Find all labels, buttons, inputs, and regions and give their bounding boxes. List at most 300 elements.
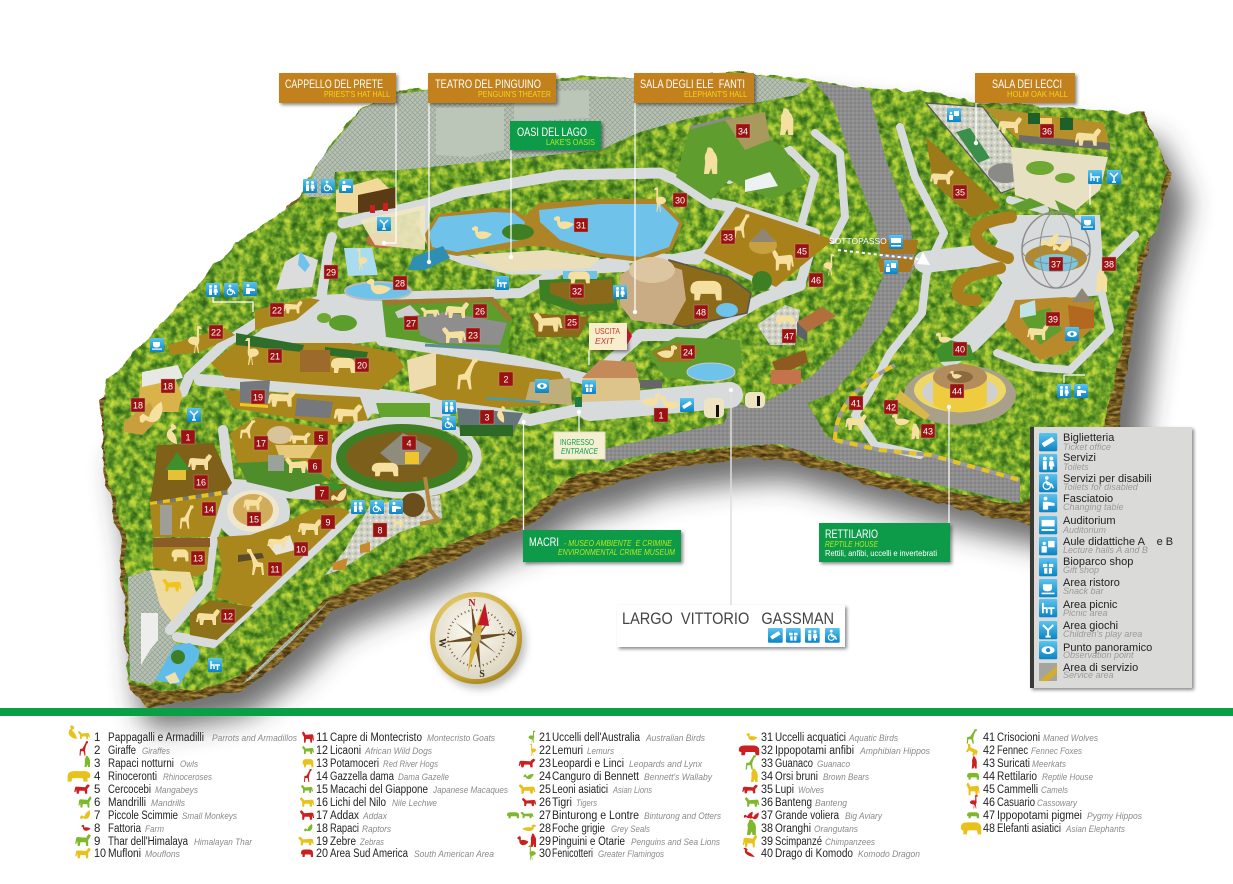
enclosure 15 <box>227 490 279 532</box>
row 34: Orsi bruni <box>775 771 818 783</box>
label: entrance <box>554 432 605 459</box>
row 35: Lupi <box>775 784 794 796</box>
marker 1: 1 <box>658 410 664 420</box>
row 33: 33 <box>761 758 773 770</box>
row 3: 3 <box>94 758 100 770</box>
marker 23: 23 <box>468 330 478 340</box>
marker 4: 4 <box>406 438 412 448</box>
row 23 <box>519 758 703 770</box>
enclosure 36 <box>983 107 1110 150</box>
row 48: Elefanti asiatici <box>997 823 1061 835</box>
green lawn near 2 <box>376 403 430 417</box>
marker 8 <box>373 523 387 537</box>
row 36: Banteng <box>775 797 812 809</box>
row 20 <box>301 848 494 860</box>
marker 30: 30 <box>675 196 685 206</box>
legend item shop: Bioparco shop <box>1063 556 1133 568</box>
marker 47: 47 <box>784 332 794 342</box>
marker 32 <box>570 284 584 298</box>
row 14: Gazzella dama <box>330 771 394 783</box>
marker 35: 35 <box>955 188 965 198</box>
hill enclosure 34 <box>676 112 808 200</box>
row 10 <box>75 848 180 860</box>
lake bank <box>425 199 683 262</box>
marker 3: 3 <box>484 412 490 422</box>
row 27: Binturong and Otters <box>644 811 721 822</box>
row 15: Japanese Macaques <box>432 785 508 796</box>
icon: observation 2 <box>535 379 549 393</box>
row 4: 4 <box>94 771 101 783</box>
marker 25 <box>565 315 579 329</box>
marker 44 <box>950 384 964 398</box>
legend item toilets <box>1039 452 1096 472</box>
legend item play <box>1039 620 1142 639</box>
enclosure 7 <box>317 482 347 507</box>
legend item ticket: Biglietteria <box>1063 432 1115 444</box>
row 13: Potamoceri <box>330 758 379 770</box>
row 14: Dama Gazelle <box>398 772 449 783</box>
row 1: 1 <box>94 732 100 744</box>
icon: picnic centre <box>495 276 509 290</box>
icons: lemur area services <box>206 282 257 297</box>
marker 4 <box>402 436 416 450</box>
row 26: Tigers <box>576 798 597 809</box>
row 38: 38 <box>761 823 773 835</box>
label: Oasi del Lago: OASI DEL LAGO <box>517 125 587 139</box>
marker 36: 36 <box>1042 126 1052 136</box>
row 16 <box>300 797 437 809</box>
legend item changing <box>1039 493 1124 512</box>
label: Largo Vittorio Gassman: LARGO VITTORIO GASSMAN <box>622 609 834 628</box>
marker 11 <box>268 562 282 576</box>
row 4 <box>68 771 212 783</box>
marker 5 <box>314 431 328 445</box>
icon: gift shop <box>582 380 596 394</box>
row 8 <box>82 823 164 835</box>
row 45: 45 <box>983 784 995 796</box>
row 16: Nile Lechwe <box>392 798 437 809</box>
marker 22 left <box>209 325 223 339</box>
row 33: Guanaco <box>817 759 850 770</box>
label: Teatro del Pinguino: TEATRO DEL PINGUINO <box>435 77 541 91</box>
marker 10 <box>294 542 308 556</box>
row 34 <box>751 769 869 783</box>
marker 44: 44 <box>952 386 962 396</box>
marker 28 <box>393 276 407 290</box>
row 25: Asian Lions <box>612 785 652 796</box>
row 23: Leopards and Lynx <box>629 759 703 770</box>
enclosure area 26, 27 and 23 <box>382 297 512 353</box>
row 2 <box>80 741 170 757</box>
marker 27 <box>404 316 418 330</box>
row 8: 8 <box>94 823 100 835</box>
label: Largo Vittorio Gassman <box>617 605 845 647</box>
row 10: 10 <box>94 848 106 860</box>
legend item picnic <box>1039 599 1118 618</box>
marker 24 <box>681 345 695 359</box>
marker 35 <box>953 185 967 199</box>
row 44: Reptile House <box>1042 772 1093 783</box>
legend item play: Area giochi <box>1063 620 1118 632</box>
row 12: Licaoni <box>330 745 361 757</box>
row 46 <box>970 795 1078 809</box>
row 25: Leoni asiatici <box>552 784 608 796</box>
row 43: Suricati <box>997 758 1030 770</box>
legend item disabled: Toilets for disabled <box>1063 482 1139 492</box>
farm hut and snake path <box>332 477 438 570</box>
cappello building <box>336 178 425 250</box>
row 38: Orangutans <box>814 824 858 835</box>
marker 25: 25 <box>567 318 577 328</box>
marker 9 <box>321 515 335 529</box>
row 47 <box>967 810 1142 822</box>
marker 12: 12 <box>223 612 233 622</box>
marker 32: 32 <box>572 286 582 296</box>
marker 11: 11 <box>270 564 280 574</box>
marker 17 <box>254 436 268 450</box>
enclosure 24 <box>647 337 742 383</box>
island foliage surface <box>103 73 1165 690</box>
row 22 <box>530 744 614 757</box>
enclosure 3 <box>457 408 523 436</box>
compass letters: W <box>436 638 447 648</box>
legend item observation: Observation point <box>1063 650 1134 660</box>
row 36: 36 <box>761 797 773 809</box>
label: Sala degli Elefanti: ELEPHANT'S HALL <box>684 89 747 99</box>
row 34: 34 <box>761 771 774 783</box>
row 15 <box>301 784 508 796</box>
label: Teatro del Pinguino: PENGUIN'S THEATER <box>478 89 551 99</box>
building at entrance <box>582 360 662 402</box>
hut 16 <box>165 452 190 480</box>
row 2: Giraffe <box>108 745 136 757</box>
row 26 <box>522 797 597 809</box>
row 9: Thar dell'Himalaya <box>108 836 189 848</box>
footpath network <box>170 127 1135 643</box>
marker 42: 42 <box>886 402 896 412</box>
row 1 <box>65 724 297 744</box>
row 19: 19 <box>316 836 328 848</box>
icon: lecture hall top <box>947 108 961 122</box>
enclosure 4 <box>336 424 468 492</box>
row 46: Casuario <box>997 797 1035 809</box>
row 23: Leopardi e Linci <box>552 758 624 770</box>
row 43: Meerkats <box>1032 759 1066 770</box>
marker 6 <box>308 459 322 473</box>
yellow dashed service road <box>150 365 1020 503</box>
label: entrance: INGRESSO <box>560 437 594 447</box>
icon: toilets 3 <box>442 400 456 414</box>
marker 39 <box>1046 312 1060 326</box>
row 32 <box>739 745 930 757</box>
label: Sala dei Lecci: SALA DEI LECCI <box>992 77 1062 91</box>
legend item picnic: Area picnic <box>1063 599 1118 611</box>
marker 47 <box>782 329 796 343</box>
marker 46 <box>809 273 823 287</box>
row 6: Mandrilli <box>108 797 146 809</box>
enclosure 25 <box>529 313 589 337</box>
marker 29 <box>324 265 338 279</box>
icon: play right <box>1107 170 1121 184</box>
gates <box>704 392 765 418</box>
compass letters: S <box>479 669 485 680</box>
enclosure 12 <box>190 600 253 640</box>
enclosures 17, 5 and 6 <box>230 417 333 492</box>
row 6: Mandrills <box>151 798 185 809</box>
row 39: Chimpanzees <box>825 837 875 848</box>
row 8: Farm <box>145 824 164 835</box>
row 45 <box>966 783 1068 796</box>
label: Rettilario: REPTILE HOUSE <box>825 539 878 549</box>
icon: changing right <box>1074 384 1088 398</box>
legend item picnic: Picnic area <box>1063 608 1108 618</box>
row 16: 16 <box>316 797 328 809</box>
row 24: Bennett's Wallaby <box>644 772 713 783</box>
row 24: 24 <box>539 771 552 783</box>
row 13: 13 <box>316 758 328 770</box>
row 44: 44 <box>983 771 996 783</box>
row 43 <box>972 756 1066 770</box>
marker 41 <box>849 396 863 410</box>
label: Sala dei Lecci: HOLM OAK HALL <box>1007 89 1068 99</box>
row 20: 20 <box>316 848 328 860</box>
label: Rettilario: RETTILARIO <box>825 527 878 541</box>
row 48: 48 <box>983 823 995 835</box>
label: Oasi del Lago: LAKE'S OASIS <box>546 137 595 147</box>
row 17: 17 <box>316 810 328 822</box>
row 32: Amphibian Hippos <box>859 746 930 757</box>
label: Macri museum: ENVIRONMENTAL CRIME MUSEUM <box>558 547 676 557</box>
marker 30 <box>673 193 687 207</box>
animal key column 4 <box>739 732 930 860</box>
marker 14 <box>202 502 216 516</box>
animal key column 2 <box>298 731 508 860</box>
enclosure 13 <box>153 538 210 577</box>
number markers <box>131 124 1116 623</box>
row 48 <box>961 822 1125 835</box>
label: Rettilario: Rettili, anfibi, uccelli e invertebrati <box>825 549 937 558</box>
row 7: Piccole Scimmie <box>108 810 178 822</box>
row 40 <box>742 847 920 860</box>
row 33: Guanaco <box>775 758 813 770</box>
hatched zone bottom left <box>128 570 333 685</box>
row 17: Addax <box>330 810 359 822</box>
legend item toilets: Toilets <box>1063 462 1089 472</box>
row 10: Mufloni <box>108 848 141 860</box>
row 18: 18 <box>316 823 328 835</box>
enclosure 9, 10, 11 <box>215 507 350 607</box>
marker 6: 6 <box>312 462 318 472</box>
row 5: Cercocebi <box>108 784 151 796</box>
marker 19 <box>251 390 265 404</box>
marker 22 <box>270 303 284 317</box>
row 18 <box>303 822 391 835</box>
legend item ticket: Ticket office <box>1063 442 1111 452</box>
row 41 <box>967 729 1098 744</box>
marker 33 <box>721 230 735 244</box>
animal key column 1 <box>65 724 297 860</box>
row 42: Fennec <box>997 745 1028 757</box>
row 11: Montecristo Goats <box>427 733 495 744</box>
marker 18 left <box>131 398 145 412</box>
row 17 <box>300 810 388 822</box>
legend item ticket <box>1039 432 1115 452</box>
row 35: 35 <box>761 784 773 796</box>
row 27: Binturong e Lontre <box>552 810 639 822</box>
main road <box>600 82 1020 503</box>
row 47: 47 <box>983 810 995 822</box>
icons: farm services <box>351 500 403 514</box>
green divider band <box>0 708 1233 716</box>
label: Oasi del Lago <box>510 121 601 150</box>
yellow monkey in sand area <box>162 579 182 591</box>
row 9: Himalayan Thar <box>194 837 253 848</box>
row 42: 42 <box>983 745 995 757</box>
marker 41: 41 <box>851 398 861 408</box>
marker 37 <box>1049 257 1063 271</box>
row 16: Lichi del Nilo <box>330 797 386 809</box>
row 46: 46 <box>983 797 995 809</box>
row 32: Ippopotami anfibi <box>775 745 854 757</box>
compass <box>430 592 526 689</box>
legend item auditorium: Auditorium <box>1063 515 1116 527</box>
row 2: Giraffes <box>142 746 170 757</box>
row 10: Mouflons <box>145 849 180 860</box>
marker 34: 34 <box>738 126 748 136</box>
label: Sala dei Lecci <box>975 73 1075 103</box>
legend item lecture <box>1039 536 1173 555</box>
row 39: 39 <box>761 836 773 848</box>
marker 33: 33 <box>723 232 733 242</box>
marker 2: 2 <box>503 374 509 384</box>
marker 12 <box>221 609 235 623</box>
lake water <box>429 204 679 257</box>
big aviary <box>1022 212 1090 288</box>
marker 2 <box>499 372 513 386</box>
marker 43 <box>921 424 935 438</box>
marker 7 <box>315 486 329 500</box>
label: Cappello del Prete: PRIEST'S HAT HALL <box>324 89 390 99</box>
marker 42 <box>884 400 898 414</box>
icon: toilets centre <box>613 285 627 299</box>
marker 38: 38 <box>1104 260 1114 270</box>
hatched hill top <box>305 75 812 197</box>
red seats at priest's hat <box>370 203 388 213</box>
row 2: 2 <box>94 745 100 757</box>
row 15: Macachi del Giappone <box>330 784 428 796</box>
row 20: South American Area <box>414 849 494 860</box>
marker 5: 5 <box>318 434 324 444</box>
row 11 <box>302 731 495 744</box>
legend item auditorium: Auditorium <box>1062 525 1107 535</box>
marker 43: 43 <box>923 426 933 436</box>
row 48: Asian Elephants <box>1065 824 1125 835</box>
row 40: Drago di Komodo <box>775 848 853 860</box>
legend item shop <box>1039 556 1133 576</box>
theater rotunda and enclosure 48 <box>620 257 751 327</box>
icon: observation 39 <box>1065 327 1079 341</box>
row 12: African Wild Dogs <box>364 746 432 757</box>
row 17: Addax <box>362 811 388 822</box>
row 19: Zebre <box>330 836 356 848</box>
row 27 <box>507 810 721 822</box>
underpass buildings <box>878 240 918 272</box>
island soil edge <box>100 90 1170 708</box>
enclosure 19 <box>223 380 368 425</box>
marker 31 <box>574 218 588 232</box>
enclosure 20 and 21 <box>211 333 404 390</box>
legend item service: Service area <box>1063 670 1114 680</box>
label: exit flag <box>589 323 632 350</box>
enclosure 33 and 45 <box>704 207 833 291</box>
marker 38 <box>1102 257 1116 271</box>
legend item lecture: Aule didattiche A e B <box>1063 536 1173 548</box>
label: Macri museum <box>523 530 681 562</box>
label: Cappello del Prete <box>279 73 396 103</box>
row 21 <box>528 731 705 744</box>
row 14 <box>304 769 449 783</box>
icon: lecture hall underpass <box>884 260 898 274</box>
marker 14: 14 <box>204 504 214 514</box>
gravel strip near oak hall <box>926 103 1036 193</box>
row 30: Greater Flamingos <box>598 849 664 860</box>
row 45: Cammelli <box>997 784 1038 796</box>
snake on reptile house <box>950 371 962 379</box>
row 31: 31 <box>761 732 773 744</box>
marker 20: 20 <box>357 360 367 370</box>
row 21: Australian Birds <box>645 733 705 744</box>
row 37 <box>743 809 883 822</box>
enclosure 16 <box>150 443 232 502</box>
row 1: Parrots and Armadillos <box>212 733 297 744</box>
row 28: Grey Seals <box>611 824 650 835</box>
animal silhouettes on map <box>138 108 1107 625</box>
marker 1 left <box>181 430 195 444</box>
row 31: Aquatic Birds <box>848 733 898 744</box>
label: exit flag: USCITA <box>595 326 620 336</box>
icon: picnic bottom <box>208 658 222 672</box>
marker 46: 46 <box>811 276 821 286</box>
enclosure 22 <box>168 298 320 355</box>
row 37: Big Aviary <box>845 811 883 822</box>
marker 26: 26 <box>475 306 485 316</box>
label: Cappello del Prete: CAPPELLO DEL PRETE <box>285 77 383 91</box>
row 25: 25 <box>539 784 551 796</box>
legend item service: Area di servizio <box>1063 662 1138 674</box>
legend item auditorium <box>1039 515 1116 535</box>
legend item changing: Changing table <box>1063 502 1124 512</box>
label: Macri museum: MACRI <box>529 535 559 549</box>
row 25 <box>519 784 652 796</box>
label: Teatro del Pinguino <box>428 73 556 103</box>
row 47: Ippopotami pigmei <box>997 810 1082 822</box>
row 44: Rettilario <box>997 771 1037 783</box>
row 5: Mangabeys <box>155 785 198 796</box>
row 22: 22 <box>539 745 551 757</box>
island shadow <box>115 102 1188 730</box>
marker 16: 16 <box>196 478 206 488</box>
marker 45 <box>795 244 809 258</box>
label: Sala degli Elefanti: SALA DEGLI ELE FANTI <box>640 77 745 91</box>
row 13 <box>303 758 438 770</box>
icon: toilets right <box>1057 384 1071 398</box>
sand around lake <box>470 250 600 272</box>
marker 20 <box>355 358 369 372</box>
row 24 <box>523 770 713 783</box>
legend item snack <box>1039 577 1120 597</box>
row 8: Fattoria <box>108 823 141 835</box>
marker 3 <box>480 410 494 424</box>
